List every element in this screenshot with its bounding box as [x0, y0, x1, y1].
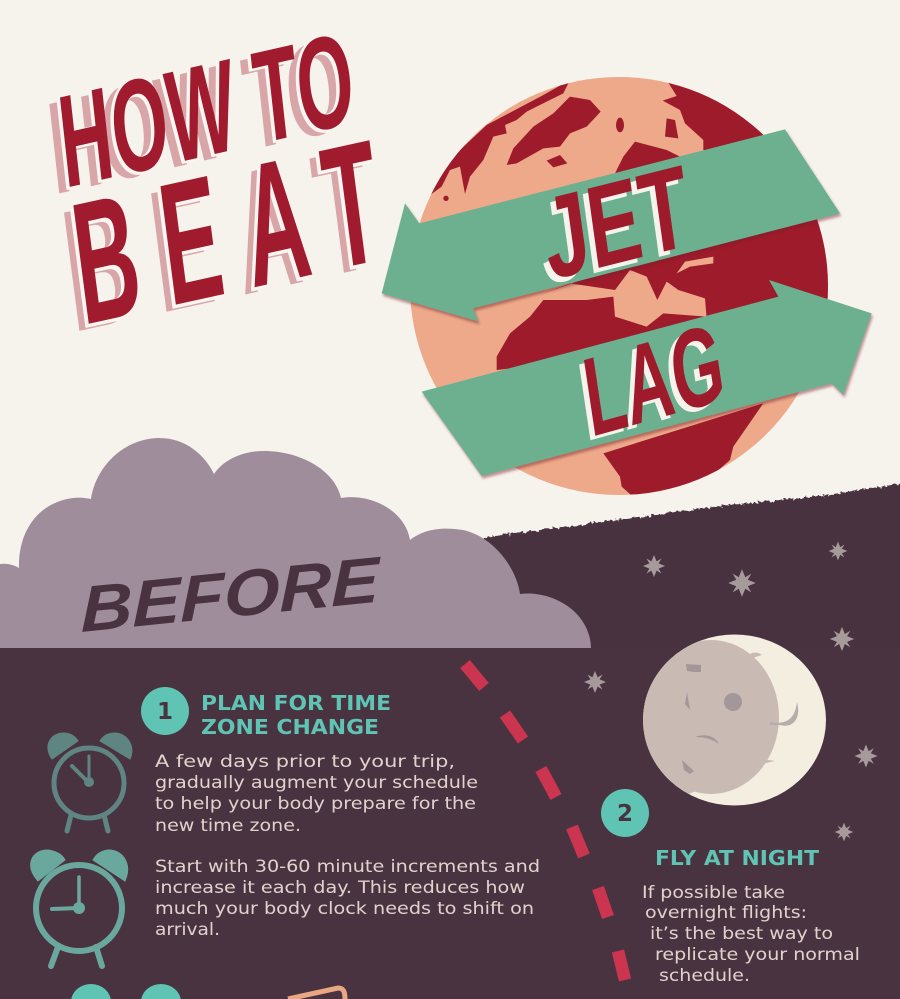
- icon: alarm clock dim: [48, 733, 132, 831]
- title: how to beat: BEAT: [53, 105, 406, 370]
- icon: alarm clock bright (cropped): [71, 984, 181, 999]
- title: how to beat: BEAT: [63, 98, 416, 363]
- icon: orange outline (cropped): [288, 988, 345, 999]
- step 1 text: Start with 30-60 minute increments and: [155, 857, 540, 876]
- ribbon: left arrow: [382, 129, 840, 322]
- title: how to beat: BEAT: [60, 101, 413, 365]
- title: how to beat: HOW TO: [52, 5, 361, 216]
- cloud: [0, 438, 591, 648]
- step 2 text: overnight flights:: [645, 903, 807, 922]
- ribbon word: lag: LAG: [576, 301, 732, 461]
- ribbon shadows: [383, 132, 873, 479]
- step 1 heading: [201, 691, 391, 739]
- step 2 text: it’s the best way to: [650, 924, 833, 943]
- step 1 text: new time zone.: [155, 816, 301, 835]
- heading: before: BEFORE: [81, 543, 381, 646]
- step 1 badge: [141, 687, 189, 735]
- step 1 text: much your body clock needs to shift on: [155, 899, 534, 918]
- step 1 text: increase it each day. This reduces how: [155, 878, 525, 897]
- icon: alarm clock mid: [31, 850, 128, 966]
- globe: [410, 77, 837, 500]
- step 1 text: arrival.: [155, 920, 220, 939]
- step 2 text: [642, 883, 860, 985]
- title: how to beat: HOW TO: [42, 12, 350, 223]
- title: how to beat: [41, 5, 416, 370]
- step 1 text: to help your body prepare for the: [155, 794, 476, 813]
- step 2 text: If possible take: [642, 883, 785, 902]
- ribbon: right arrow: [422, 280, 872, 476]
- step 2 text: replicate your normal: [655, 945, 860, 964]
- step 1 heading: ZONE CHANGE: [201, 715, 379, 739]
- step 1 text: A few days prior to your trip,: [155, 752, 455, 771]
- ribbon word: jet: JET: [531, 147, 692, 311]
- step 2 badge: 2: [617, 801, 633, 827]
- ribbon word: lag: LAG: [571, 305, 727, 465]
- step 1 heading: PLAN FOR TIME: [201, 691, 391, 715]
- step 1 badge: 1: [157, 699, 173, 725]
- stars: [584, 542, 878, 841]
- globe with ribbons: [382, 77, 873, 500]
- flight path dashes: [465, 664, 625, 980]
- step 2 badge: [601, 789, 649, 837]
- dark night background: [0, 483, 900, 999]
- title: how to beat: HOW TO: [50, 7, 358, 218]
- moon: [630, 634, 826, 806]
- step 1 text: gradually augment your schedule: [155, 773, 478, 792]
- ribbon word: jet: JET: [536, 142, 697, 305]
- step 2 heading: FLY AT NIGHT: [655, 846, 819, 870]
- step 2 text: schedule.: [659, 966, 750, 985]
- step 1 text: [155, 752, 540, 939]
